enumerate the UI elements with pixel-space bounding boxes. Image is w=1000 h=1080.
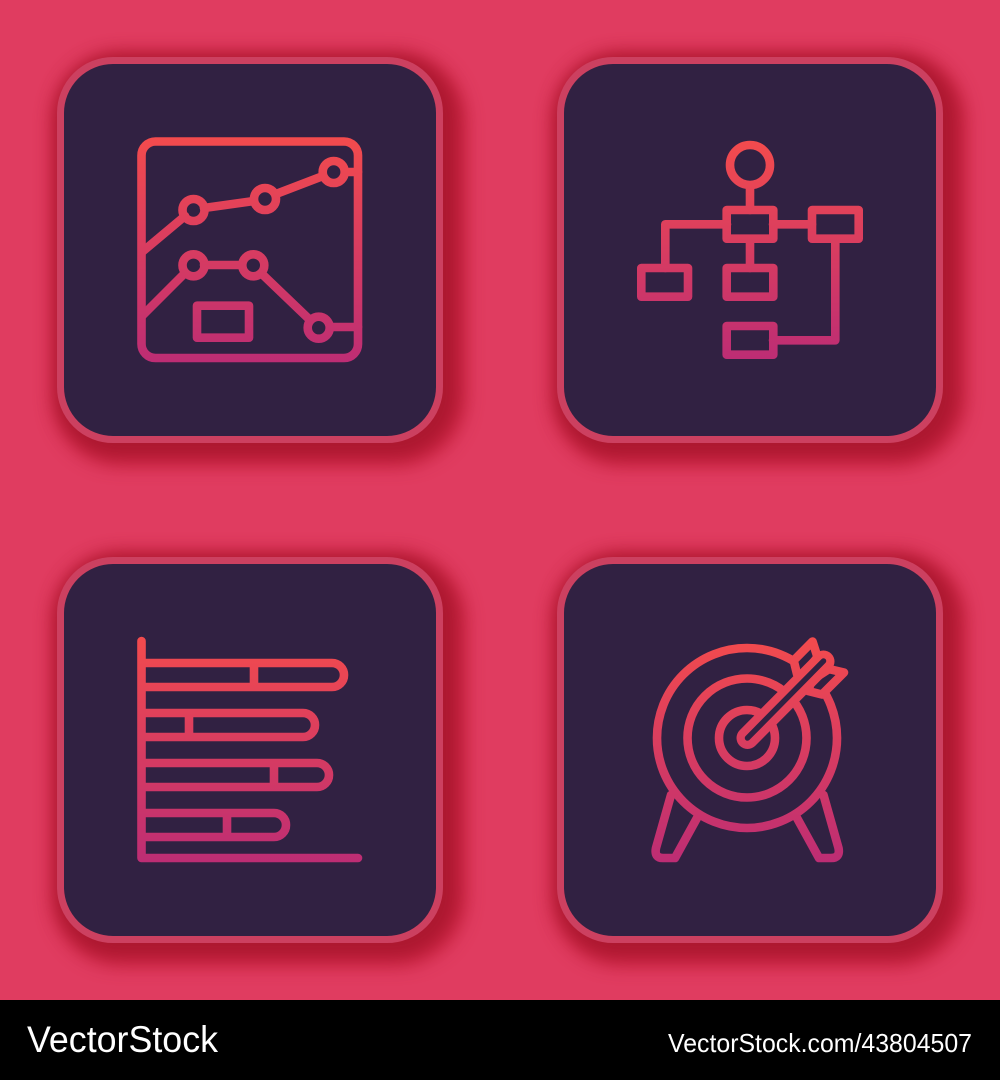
icon: horizontal bar chart	[142, 641, 358, 858]
icon: flowchart diagram	[641, 145, 859, 355]
icon: line chart with markers	[142, 142, 358, 358]
panel: line chart	[57, 57, 443, 443]
image id: VectorStock.com/43804507	[668, 1028, 972, 1058]
panel: target with arrow	[557, 557, 943, 943]
icon: archery target with arrow	[656, 642, 844, 858]
footer bar	[0, 1000, 1000, 1080]
panel: flowchart	[557, 57, 943, 443]
brand name: VectorStock	[27, 1019, 218, 1060]
panel: horizontal bar chart	[57, 557, 443, 943]
